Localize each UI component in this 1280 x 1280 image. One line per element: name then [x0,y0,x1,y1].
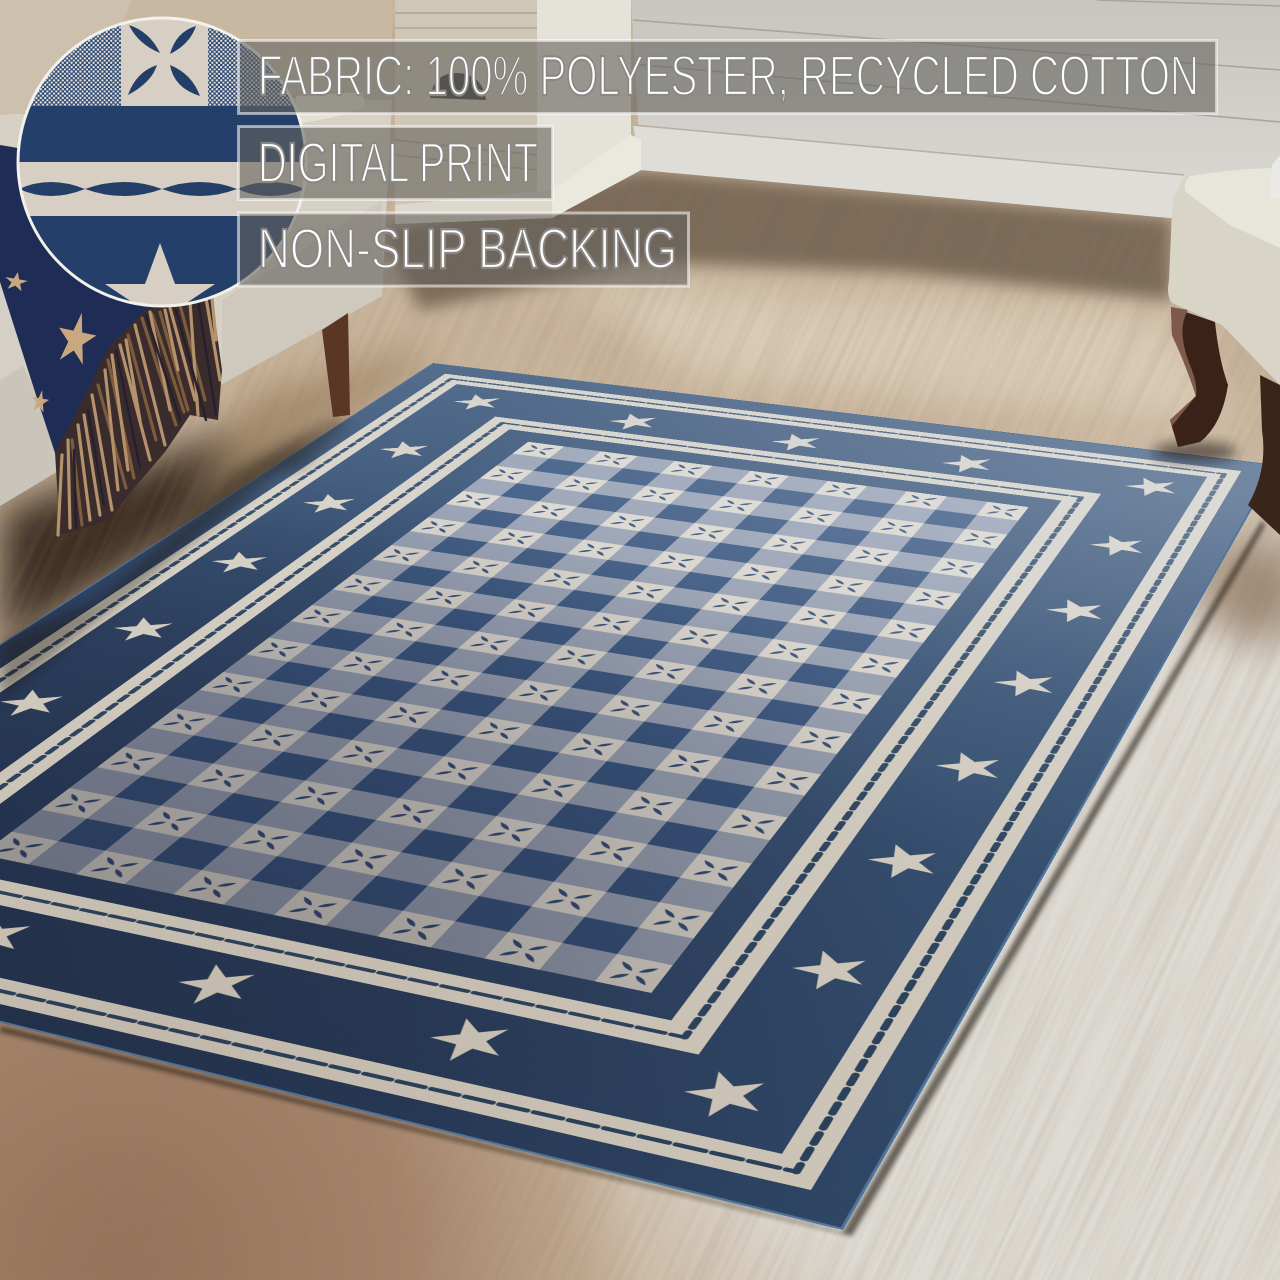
lighting overlays [0,363,1277,1230]
sofa [0,0,392,506]
chair and rug shadows [0,418,1237,700]
checked field [0,442,1029,993]
detail inset circle [18,18,306,320]
woven gingham [31,26,293,106]
foreground: furniture, detail inset and feature labels [0,0,1280,702]
cream square with flower [121,18,208,106]
inner border stripe [0,423,1081,1037]
upholstered ottoman [1168,155,1280,535]
ottoman legs [1170,307,1280,535]
throw blanket with fringe [0,145,222,535]
border stars [0,392,1191,1135]
inset star [105,243,215,304]
throw stars [3,270,100,413]
white louvered cabinet [395,0,641,224]
rug with star border and gingham check field [0,363,1262,1230]
sofa leg [322,313,350,417]
small object on ottoman [1270,155,1280,198]
outer border stripe [0,379,1224,1172]
label: digital print [238,126,552,200]
rug base [0,363,1277,1230]
label: non-slip backing: NON-SLIP BACKING [258,217,677,281]
label: digital print: DIGITAL PRINT [258,131,538,195]
rug shadow on floor [0,520,1265,1236]
fringe strands [58,298,220,535]
cream band with lens dashes [18,162,306,216]
label: non-slip backing [238,213,688,286]
rug binding edge [0,363,1276,1229]
wall with shiplap boards [631,0,1280,228]
